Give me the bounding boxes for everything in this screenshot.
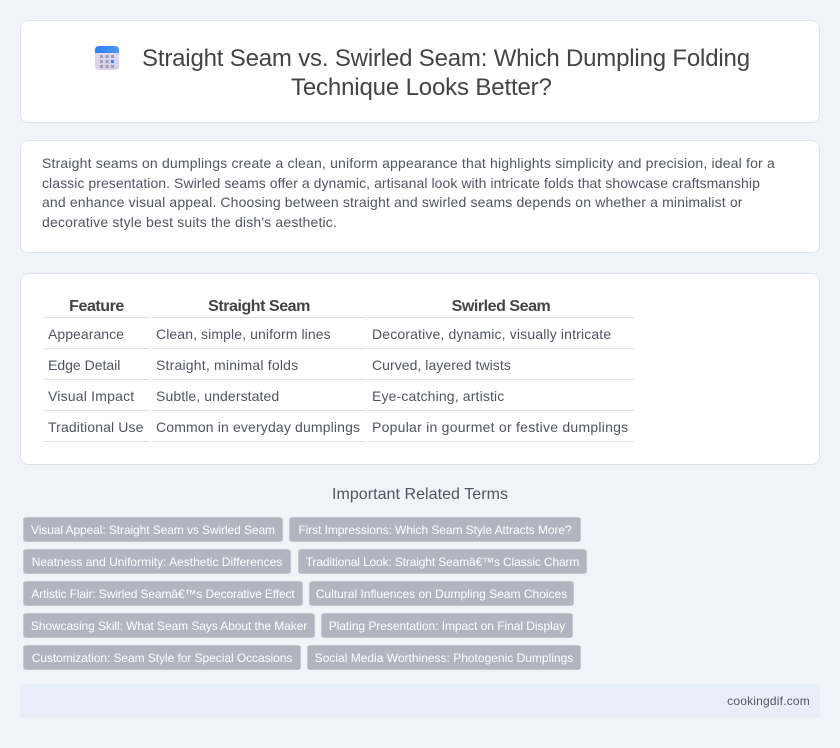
comparison table: Decorative, dynamic, visually intricate xyxy=(372,326,611,342)
related terms tags: Cultural Influences on Dumpling Seam Choices xyxy=(316,587,567,601)
comparison table xyxy=(44,298,634,442)
comparison table: Traditional Use xyxy=(48,419,144,435)
comparison table: Straight, minimal folds xyxy=(156,357,298,373)
intro paragraph: Straight seams on dumplings create a clean, uniform appearance that highlights simplicity and precision, ideal for a xyxy=(42,155,775,171)
comparison table: Subtle, understated xyxy=(156,388,279,404)
comparison table: Feature xyxy=(69,298,124,315)
related terms tags: Neatness and Uniformity: Aesthetic Differences xyxy=(32,555,282,569)
comparison table: Visual Impact xyxy=(48,388,134,404)
comparison table: Clean, simple, uniform lines xyxy=(156,326,331,342)
icon: calendar xyxy=(95,46,119,70)
related terms tags xyxy=(23,517,587,670)
related terms tags: Visual Appeal: Straight Seam vs Swirled Seam xyxy=(31,523,275,537)
related terms tags: Showcasing Skill: What Seam Says About the Maker xyxy=(31,619,307,633)
comparison table: Common in everyday dumplings xyxy=(156,419,360,435)
related terms tags: Customization: Seam Style for Special Occasions xyxy=(32,651,292,665)
related terms heading: Important Related Terms xyxy=(332,486,508,503)
footer bar xyxy=(20,684,820,718)
comparison table: Eye-catching, artistic xyxy=(372,388,504,404)
footer site name: cookingdif.com xyxy=(727,694,810,708)
comparison table: Straight Seam xyxy=(208,298,310,315)
title xyxy=(142,45,750,101)
related terms tags: Plating Presentation: Impact on Final Display xyxy=(329,619,565,633)
related terms tags: Artistic Flair: Swirled Seamâ€™s Decorative Effect xyxy=(31,587,295,601)
intro paragraph: decorative style best suits the dish's aesthetic. xyxy=(42,214,337,230)
related terms tags: First Impressions: Which Seam Style Attracts More? xyxy=(298,523,572,537)
title: Technique Looks Better? xyxy=(291,74,552,101)
comparison table: Edge Detail xyxy=(48,357,120,373)
intro text panel xyxy=(20,140,820,253)
intro paragraph: classic presentation. Swirled seams offer a dynamic, artisanal look with intricate folds that showcase craftsmanship xyxy=(42,175,760,191)
title: Straight Seam vs. Swirled Seam: Which Dumpling Folding xyxy=(142,45,750,72)
intro paragraph xyxy=(42,155,775,230)
comparison table: Curved, layered twists xyxy=(372,357,511,373)
comparison table: Appearance xyxy=(48,326,124,342)
related terms tags: Social Media Worthiness: Photogenic Dumplings xyxy=(315,651,573,665)
intro paragraph: and enhance visual appeal. Choosing between straight and swirled seams depends on whether a minimalist or xyxy=(42,194,743,210)
comparison table: Popular in gourmet or festive dumplings xyxy=(372,419,628,435)
comparison table panel xyxy=(20,273,820,465)
comparison table: Swirled Seam xyxy=(452,298,550,315)
header panel xyxy=(20,20,820,123)
related terms tags: Traditional Look: Straight Seamâ€™s Classic Charm xyxy=(306,555,579,569)
